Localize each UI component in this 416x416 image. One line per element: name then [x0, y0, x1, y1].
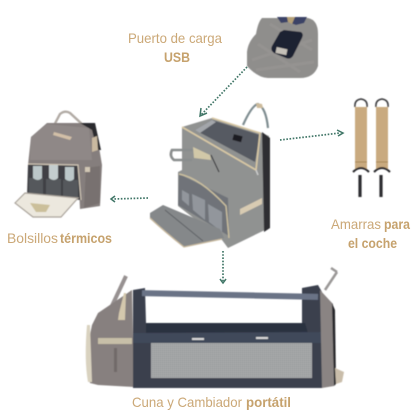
- icon: left backpack with thermal pockets: [15, 112, 102, 217]
- arrow: centre bag to left bag: [111, 196, 148, 202]
- heading: Cuna y Cambiador portátil: Cuna y Cambiador: [132, 394, 242, 410]
- icon: centre backpack open: [150, 103, 270, 248]
- icon: USB port photo: [247, 17, 318, 78]
- arrow: centre bag to crib: [220, 251, 226, 283]
- heading: Puerto de carga USB: [128, 30, 222, 65]
- arrow: centre bag to straps: [280, 130, 343, 140]
- arrow: USB port to bag: [200, 67, 247, 116]
- heading: Bolsillos térmicos: Bolsillos: [7, 230, 58, 246]
- icon: bag opened as portable crib: [86, 268, 344, 388]
- heading: Amarras para el coche: Amarras: [331, 216, 381, 232]
- heading: Amarras para el coche: para: [384, 216, 410, 232]
- heading: Puerto de carga USB: Puerto de carga: [128, 30, 222, 46]
- heading: Puerto de carga USB: USB: [164, 49, 190, 65]
- heading: Bolsillos térmicos: [7, 230, 112, 246]
- icon: stroller straps: [353, 99, 390, 197]
- heading: Amarras para el coche: el coche: [348, 235, 397, 251]
- heading: Bolsillos térmicos: térmicos: [60, 230, 112, 246]
- heading: Cuna y Cambiador portátil: portátil: [246, 394, 291, 410]
- heading: Amarras para el coche: [331, 216, 410, 251]
